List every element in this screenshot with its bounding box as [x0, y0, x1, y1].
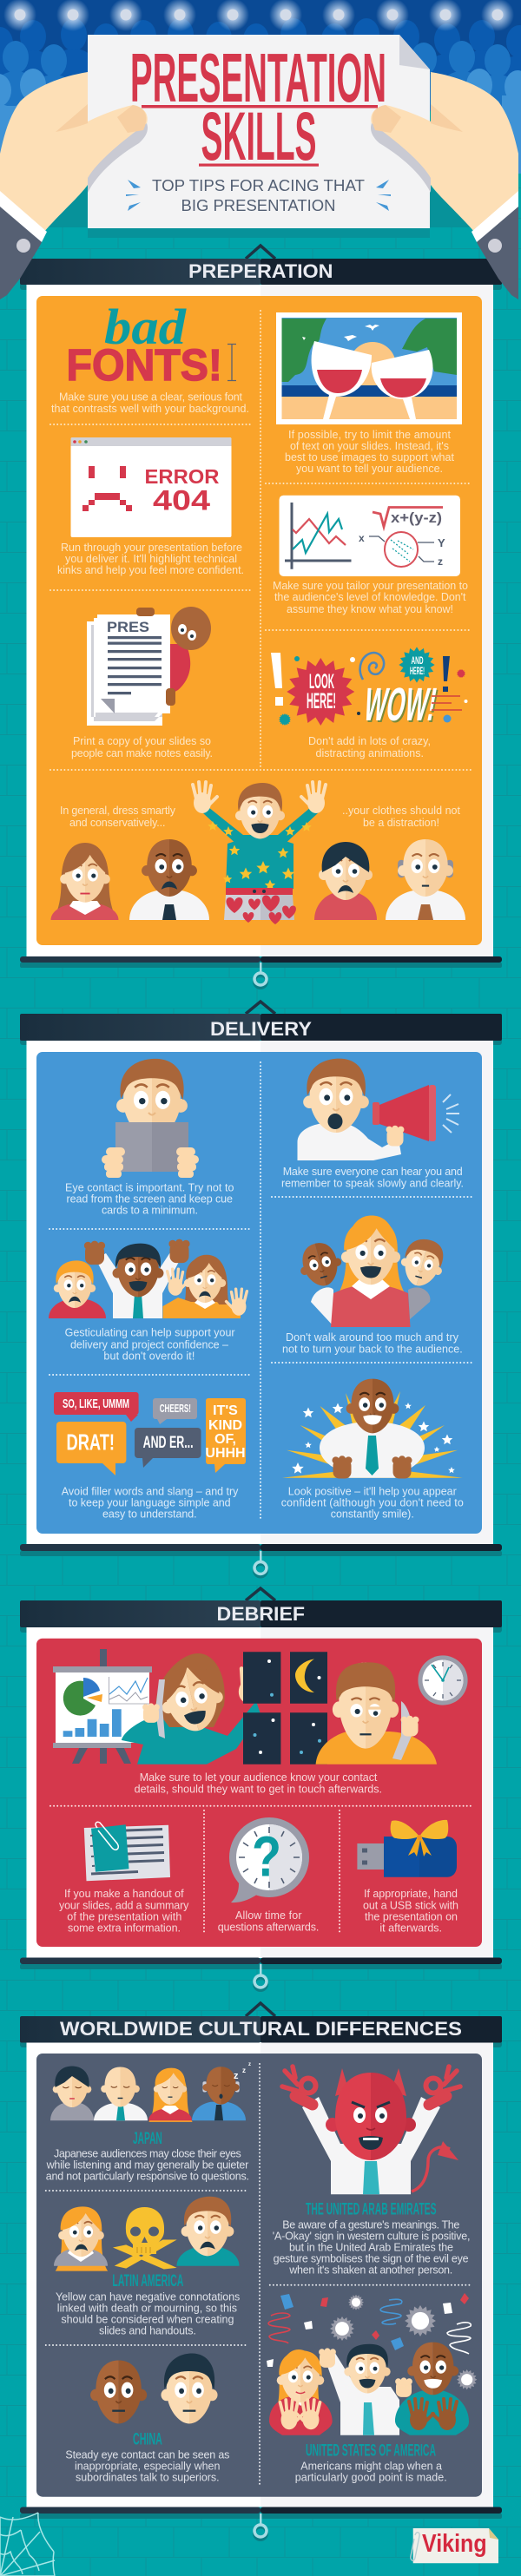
text: gesticulating tip: but don't overdo it! — [103, 1350, 195, 1363]
icon: night window — [243, 1652, 327, 1764]
header bar: DEBRIEF — [217, 1603, 305, 1625]
text: eye contact tip: cards to a minimum. — [102, 1205, 198, 1217]
text: tailor tip: Make sure you tailor your presentation to — [273, 580, 468, 592]
character: man in pyjamas — [193, 782, 326, 924]
icon: yellow group with skull — [54, 2197, 240, 2271]
text: fonts tip: that contrasts well with your background. — [51, 403, 249, 415]
icon: presentation easel — [53, 1649, 152, 1764]
header bar — [20, 259, 502, 285]
text: images tip: best to use images to support what — [285, 451, 455, 463]
icon: error 404 window: ERROR — [144, 465, 220, 488]
text: tailor tip: the audience's level of knowledge. Don't — [274, 591, 466, 603]
wine glasses — [312, 341, 433, 419]
man in shirt — [319, 2344, 412, 2435]
icon: three people, woman in front — [294, 1215, 449, 1327]
person 4 asleep: z — [234, 2071, 239, 2081]
spider web corner — [0, 2513, 55, 2576]
text: uae tip — [273, 2218, 471, 2277]
hands holding the title paper — [0, 72, 518, 299]
icon: bad fonts: FONTS! — [66, 340, 222, 390]
icon: question clock bubble — [229, 1817, 309, 1902]
text: usb stick tip: the presentation on — [365, 1910, 458, 1922]
text: handout tip — [71, 735, 213, 759]
blue panel — [36, 1052, 482, 1534]
title paper — [88, 35, 430, 228]
text: images tip — [285, 429, 455, 475]
text: china tip: inappropriate, especially when — [75, 2461, 220, 2473]
person 4 asleep: z — [242, 2067, 246, 2074]
icon: wall clock — [418, 1655, 468, 1705]
audience crowd — [0, 0, 521, 175]
text: latin america tip: linked with death or mourning, so this — [57, 2303, 237, 2315]
text: images tip: of text on your slides. Instead, it's — [290, 440, 449, 452]
text: usb stick tip: it afterwards. — [379, 1922, 442, 1934]
right woman — [163, 1255, 247, 1318]
section: preperation — [20, 246, 502, 988]
text: eye contact tip — [65, 1182, 234, 1217]
black man clapping — [395, 2343, 469, 2435]
text: usb stick tip: out a USB stick with — [363, 1899, 458, 1911]
viking logo tag — [411, 2528, 498, 2563]
icon: charts and maths card: x+(y-z) — [391, 509, 442, 526]
bubble: it's kind of, uhhh: KIND — [208, 1418, 242, 1433]
icon: question clock bubble: ? — [252, 1824, 281, 1889]
text: look positive tip — [281, 1486, 464, 1521]
icon: crazy animations: AND — [412, 654, 424, 667]
character: black-haired man — [314, 842, 377, 920]
text: tailor tip — [273, 580, 468, 615]
character: brown-haired woman — [50, 843, 118, 920]
bubble: it's kind of, uhhh — [205, 1398, 246, 1473]
header bar: PREPERATION — [188, 260, 333, 282]
ok hand left — [282, 2067, 316, 2105]
text: fonts tip: Make sure you use a clear, serious font — [59, 391, 243, 404]
bubble: so, like, ummm — [54, 1392, 139, 1422]
text: dress smartly — [60, 805, 176, 829]
icon: gesticulating group — [49, 1239, 247, 1318]
bottom rail with pull ring — [20, 956, 502, 988]
text: china tip: subordinates talk to superiors. — [76, 2472, 220, 2484]
text: latin america tip: should be considered when creating — [61, 2314, 234, 2326]
text: speak slowly tip — [281, 1166, 464, 1190]
text: gesticulating tip: Gesticulating can help support your — [65, 1326, 235, 1338]
text: latin america tip: slides and handouts. — [99, 2325, 196, 2337]
text: look positive tip: Look positive – it'll help you appear — [288, 1486, 457, 1498]
text: eye contact tip: Eye contact is important. Try not to — [65, 1182, 234, 1194]
viking logo tag: Viking — [422, 2530, 487, 2558]
text: tailor tip: assume they know what you know! — [287, 603, 453, 615]
text: rehearse tip — [57, 542, 244, 576]
text: handout summary tip — [59, 1888, 189, 1934]
character: grey-haired man — [386, 839, 465, 920]
text: uae tip: but in the United Arab Emirates the — [289, 2242, 453, 2254]
text: animations tip — [308, 735, 431, 759]
heading: latin america: LATIN AMERICA — [112, 2271, 183, 2290]
icon: charts and maths card: Y — [438, 536, 445, 549]
text: images tip: If possible, try to limit the amount — [288, 429, 452, 441]
text: uae tip: when it's shaken at another person. — [288, 2264, 452, 2277]
text: uae tip: 'A-Okay' sign in western culture is positive, — [273, 2231, 471, 2243]
man — [177, 2197, 240, 2266]
subtitle: TOP TIPS FOR ACING THAT — [152, 177, 365, 194]
text: don't walk around tip — [282, 1331, 463, 1355]
header bar — [20, 1600, 502, 1627]
header bar — [20, 2016, 502, 2043]
text: eye contact tip: read from the screen and keep cue — [66, 1193, 233, 1206]
person 4 asleep — [192, 2062, 251, 2120]
text: look positive tip: constantly smile). — [331, 1508, 414, 1521]
character: worried bald man — [129, 839, 209, 920]
text: china tip: Steady eye contact can be seen as — [65, 2449, 229, 2461]
text: animations tip: Don't add in lots of crazy, — [308, 735, 431, 747]
bubble: cheers: CHEERS! — [160, 1402, 191, 1415]
ok hand right — [425, 2067, 460, 2105]
icon: usb gift — [357, 1820, 457, 1877]
icon: crazy animations — [271, 647, 467, 733]
section: worldwide cultural differences — [20, 2003, 502, 2540]
icon: bad fonts — [66, 299, 236, 390]
icon: clapping americans with confetti — [267, 2293, 477, 2435]
left person — [49, 1260, 106, 1318]
icon: bad fonts: bad — [104, 299, 187, 355]
icon: error 404 window — [71, 437, 231, 537]
bottom rail with pull ring — [20, 2507, 502, 2540]
header bar — [20, 1014, 502, 1041]
text: rehearse tip: Run through your presentation before — [61, 542, 242, 554]
text: contact details tip — [135, 1771, 382, 1795]
icon: beach slide — [276, 312, 462, 424]
heading: japan: JAPAN — [133, 2129, 162, 2148]
bubble: and er: AND ER... — [143, 1434, 194, 1452]
text: rehearse tip: kinks and help you feel more confident. — [57, 564, 244, 576]
icon: devil with ok gestures — [282, 2067, 460, 2194]
person 3 — [148, 2068, 193, 2122]
sparkle marks — [126, 180, 391, 211]
text: usb stick tip: If appropriate, hand — [364, 1888, 458, 1900]
icon: paper stack with peeking man — [87, 607, 211, 726]
text: uae tip: gesture symbolises the sign of the evil eye — [274, 2253, 469, 2265]
text: japan tip — [46, 2148, 249, 2183]
text: china tip — [65, 2449, 229, 2484]
text: usa tip: particularly good point is made. — [295, 2472, 447, 2484]
text: animations tip: distracting animations. — [316, 747, 424, 759]
person 1 — [50, 2067, 94, 2120]
text: latin america tip: Yellow can have negative connotations — [56, 2291, 240, 2303]
text: usb stick tip — [363, 1888, 458, 1934]
section: delivery — [20, 1002, 502, 1577]
text: speak slowly tip: Make sure everyone can hear you and — [283, 1166, 463, 1178]
bubble: it's kind of, uhhh: OF, — [214, 1432, 236, 1447]
text: dress smartly: In general, dress smartly — [60, 805, 176, 817]
bottom rail with pull ring — [20, 1544, 502, 1577]
confetti — [267, 2293, 477, 2389]
orange panel — [36, 296, 482, 945]
icon: speech bubbles — [54, 1392, 246, 1475]
title: Presentation Skills: SKILLS — [201, 97, 316, 174]
red panel — [36, 1639, 482, 1947]
text: handout summary tip: some extra information. — [68, 1922, 181, 1934]
text: usa tip — [295, 2461, 447, 2484]
text: filler words tip — [62, 1486, 239, 1521]
icon: man with megaphone — [297, 1059, 459, 1160]
text: images tip: you want to tell your audience. — [296, 463, 443, 475]
icon: charts and maths card — [280, 496, 460, 576]
character: woman on phone waving — [122, 1653, 269, 1764]
header bar: WORLDWIDE CULTURAL DIFFERENCES — [60, 2018, 462, 2040]
character: tired man on phone — [316, 1662, 437, 1764]
icon: charts and maths card: z — [438, 555, 443, 568]
text: contact details tip: details, should they want to get in touch afterwards. — [135, 1783, 382, 1795]
person 2 — [94, 2067, 148, 2120]
woman clapping — [269, 2349, 333, 2435]
section: debrief — [20, 1588, 502, 1990]
heading: china: CHINA — [133, 2430, 162, 2449]
text: filler words tip: easy to understand. — [102, 1508, 197, 1521]
bubble: drat — [56, 1422, 126, 1475]
text: dress smartly: and conservatively... — [69, 817, 165, 829]
text: questions tip — [218, 1909, 319, 1933]
middle man — [84, 1239, 190, 1318]
subtitle — [152, 177, 365, 214]
text: contact details tip: Make sure to let your audience know your contact — [140, 1771, 378, 1784]
text: look positive tip: confident (although you don't need to — [281, 1497, 464, 1509]
text: japan tip: Japanese audiences may close their eyes — [54, 2148, 241, 2160]
text: uae tip: Be aware of a gesture's meanings. The — [282, 2218, 459, 2231]
text: don't walk around tip: Don't walk around too much and try — [286, 1331, 459, 1344]
text: rehearse tip: you deliver it. It'll highlight technical — [65, 553, 237, 565]
text: filler words tip: Avoid filler words and slang – and try — [62, 1486, 239, 1498]
icon: crazy animations: WOW! — [362, 680, 442, 733]
text: don't walk around tip: not to turn your back to the audience. — [282, 1343, 463, 1355]
text: handout summary tip: of the presentation with — [67, 1910, 181, 1922]
text: latin america tip — [56, 2291, 240, 2337]
text: questions tip: Allow time for — [235, 1909, 302, 1922]
title: Presentation Skills — [130, 39, 386, 174]
bubble: it's kind of, uhhh: UHHH — [205, 1446, 246, 1461]
text: handout tip: people can make notes easily. — [71, 747, 213, 759]
skull and crossbones — [117, 2207, 172, 2268]
text: fonts tip — [51, 391, 249, 415]
text: japan tip: while listening and may generally be quieter — [46, 2159, 248, 2172]
text: usa tip: Americans might clap when a — [300, 2461, 442, 2473]
shadow under title paper — [42, 187, 479, 238]
text: speak slowly tip: remember to speak slowly and clearly. — [281, 1178, 464, 1190]
text: japan tip: and not particularly responsive to questions. — [46, 2171, 249, 2183]
bubble: cheers — [153, 1398, 197, 1424]
icon: error 404 window: 404 — [153, 485, 210, 516]
text: gesticulating tip — [65, 1326, 235, 1363]
icon: charts and maths card: x — [359, 532, 365, 544]
icon: sleeping japanese audience — [50, 2062, 251, 2122]
text: filler words tip: to keep your language simple and — [69, 1497, 231, 1509]
header bar: DELIVERY — [210, 1018, 312, 1040]
bubble: drat: DRAT! — [66, 1429, 115, 1456]
text: handout summary tip: If you make a handout of — [64, 1888, 184, 1900]
woman — [54, 2206, 108, 2271]
bubble: and er — [135, 1428, 201, 1468]
icon: crazy animations: LOOK — [309, 670, 334, 693]
icon: handout with notebook — [84, 1822, 170, 1881]
text: clothes not a distraction: be a distraction! — [363, 817, 439, 829]
icon: confident man with burst — [282, 1379, 463, 1479]
hanger — [246, 246, 275, 259]
text: clothes not a distraction — [342, 805, 461, 829]
text: handout summary tip: your slides, add a summary — [59, 1899, 189, 1911]
text: gesticulating tip: delivery and project confidence – — [70, 1339, 228, 1351]
slate panel — [36, 2054, 482, 2497]
icon: paper stack with peeking man: PRES — [107, 619, 149, 635]
icon: two faces china — [90, 2354, 218, 2423]
bubble: it's kind of, uhhh: IT'S — [213, 1403, 238, 1418]
bubble: so, like, ummm: SO, LIKE, UMMM — [63, 1397, 129, 1411]
icon: man reading card — [102, 1059, 199, 1178]
subtitle: BIG PRESENTATION — [181, 197, 335, 214]
icon: crazy animations: HERE! — [410, 665, 425, 677]
text: questions tip: questions afterwards. — [218, 1921, 319, 1933]
text: clothes not a distraction: ..your clothes should not — [342, 805, 461, 817]
person 4 asleep: z — [248, 2062, 251, 2067]
icon: crazy animations: HERE! — [307, 689, 336, 713]
screen — [26, 285, 260, 956]
bottom rail with pull ring — [20, 1958, 502, 1990]
icon: crazy animations: WOW! — [360, 678, 441, 731]
text: handout tip: Print a copy of your slides so — [73, 735, 211, 747]
